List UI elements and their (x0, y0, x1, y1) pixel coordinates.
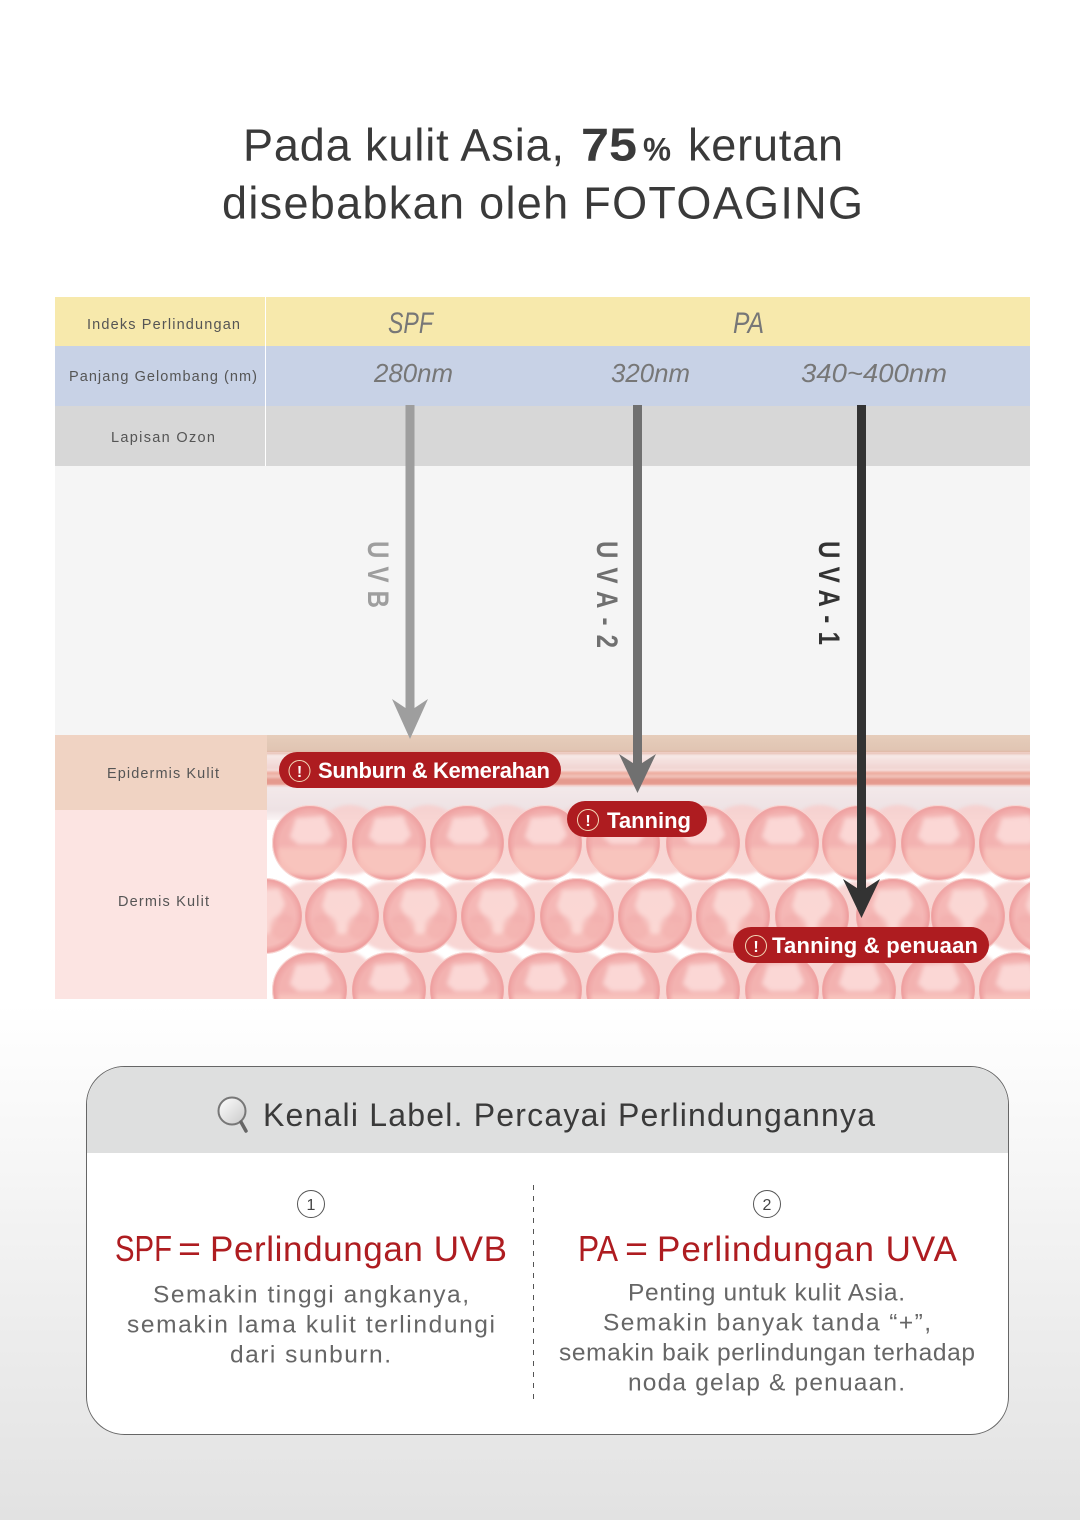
callout: tanning and aging: Tanning & penuaan (772, 933, 978, 958)
title: disebabkan oleh FOTOAGING (222, 178, 863, 228)
title: kerutan (688, 120, 843, 170)
arrow: UVA-1: UVA-1 (812, 541, 847, 645)
atmosphere area (55, 466, 1030, 735)
column: PA: noda gelap & penuaan. (628, 1370, 905, 1396)
column: SPF: Perlindungan UVB (210, 1230, 507, 1269)
row: protection index (55, 297, 1030, 346)
spheres row 1 (272, 805, 1054, 881)
column: PA: Perlindungan UVA (657, 1230, 958, 1269)
row: epidermis label (55, 735, 267, 810)
row: protection index: PA (733, 307, 764, 340)
arrow: UVB (361, 405, 428, 739)
row: ozone layer (55, 406, 1030, 466)
skin illustration (267, 735, 1030, 999)
column: SPF: SPF (115, 1228, 172, 1269)
icon: magnifier (218, 1098, 246, 1131)
callout: tanning and aging: ! (753, 939, 759, 956)
row: protection index: SPF (388, 307, 434, 340)
title: 75 (581, 118, 637, 170)
arrow: UVA-2 (590, 405, 656, 793)
back row of pale spheres (289, 804, 1028, 999)
spheres row 3 (272, 952, 1030, 999)
row: dermis label (55, 810, 267, 999)
callout: sunburn: Sunburn & Kemerahan (318, 758, 550, 783)
row: ozone layer: Lapisan Ozon (111, 430, 215, 446)
column: SPF: Semakin tinggi angkanya, (153, 1282, 469, 1308)
row: dermis label: Dermis Kulit (118, 894, 209, 910)
arrow: UVA-2: UVA-2 (590, 541, 625, 648)
column divider (532, 1185, 534, 1403)
column: PA: = (625, 1228, 648, 1269)
column: SPF (115, 1190, 507, 1368)
row: epidermis label: Epidermis Kulit (107, 766, 219, 782)
arrow: UVA-1 (812, 405, 880, 918)
row: wavelength: 280nm (373, 358, 453, 388)
column: PA: 2 (763, 1197, 772, 1214)
card header: Kenali Label. Percayai Perlindungannya (263, 1097, 875, 1133)
callout: tanning (567, 801, 707, 837)
card header (87, 1067, 1008, 1153)
column: SPF: semakin lama kulit terlindungi (127, 1312, 495, 1338)
column: PA: Semakin banyak tanda “+”, (603, 1310, 931, 1336)
spheres row 2 (227, 878, 1080, 954)
column: PA: Penting untuk kulit Asia. (628, 1280, 905, 1306)
panel: UV penetration table (55, 297, 1030, 999)
title: Pada kulit Asia, (243, 120, 564, 170)
row: wavelength: Panjang Gelombang (nm) (69, 369, 257, 385)
callout: tanning: ! (585, 813, 591, 830)
column: SPF: 1 (307, 1197, 316, 1214)
callout: sunburn: ! (297, 764, 302, 781)
column: SPF: dari sunburn. (230, 1342, 391, 1368)
row: wavelength: 340~400nm (801, 358, 947, 388)
row: wavelength (55, 346, 1030, 406)
row: wavelength: 320nm (611, 358, 690, 388)
callout: tanning: Tanning (607, 808, 691, 833)
arrow: UVB: UVB (361, 541, 396, 608)
column: PA: PA (578, 1228, 618, 1269)
panel: label guide card (86, 1066, 1008, 1434)
row: protection index: Indeks Perlindungan (87, 317, 240, 333)
title: % (643, 132, 671, 168)
callout: sunburn (279, 752, 561, 788)
title (222, 118, 863, 228)
column: PA (559, 1190, 975, 1396)
column: PA: semakin baik perlindungan terhadap (559, 1340, 975, 1366)
callout: tanning and aging (733, 927, 989, 963)
column: SPF: = (178, 1228, 201, 1269)
